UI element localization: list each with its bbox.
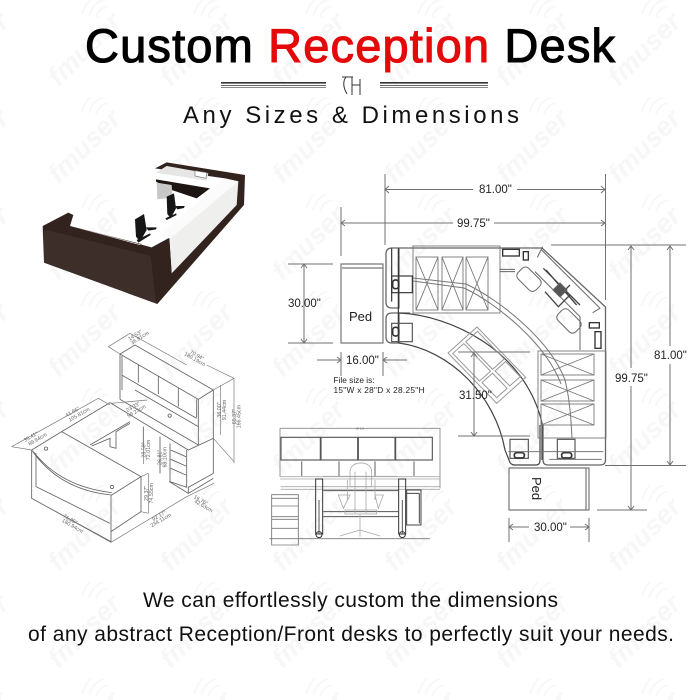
lower pedestal with rotated label: Ped xyxy=(529,477,544,500)
top dimension 81.00 xyxy=(385,174,606,300)
monitor stands xyxy=(302,461,414,476)
chair rear xyxy=(165,193,185,220)
dimension labels: 36.91cm xyxy=(130,330,151,346)
dimension labels: 41.66" xyxy=(65,406,81,419)
chair front xyxy=(135,214,157,243)
left pedestal with label xyxy=(341,264,383,343)
front elevation drawing: 96 1/2 xyxy=(356,427,364,431)
dimension labels: 70.94" xyxy=(188,349,205,362)
dimension 16.00: 16.00" xyxy=(346,355,379,367)
task chair xyxy=(338,463,383,537)
dimension 31.50 xyxy=(458,352,530,436)
dimension labels: 180.94cm xyxy=(61,518,84,535)
dimension labels: 26.81" xyxy=(158,450,164,465)
monitors xyxy=(281,437,432,460)
dimension labels: 89.94cm xyxy=(27,432,49,448)
dimension labels: 91.44cm xyxy=(222,399,228,420)
computer tower xyxy=(407,490,421,525)
right dimension 99.75: 99.75" xyxy=(615,373,648,385)
dimension 30.00 left: 30.00" xyxy=(288,298,321,310)
upper storage units xyxy=(413,246,500,313)
desktop surfaces xyxy=(280,476,440,489)
front elevation drawing xyxy=(269,427,440,545)
dimension 30.00 left xyxy=(288,264,333,343)
dimension labels: 23.33" xyxy=(125,401,142,414)
divider with ornament xyxy=(221,77,488,95)
left pedestal with label: Ped xyxy=(349,309,372,324)
floor plan of reception desk xyxy=(386,246,606,465)
dimension labels: 16.76" xyxy=(192,494,209,507)
dimension labels: 42.63cm xyxy=(193,499,214,514)
dimension labels: 29.37" xyxy=(144,486,150,501)
top dimension 99.75 xyxy=(341,207,605,256)
dimension 30.00 bottom xyxy=(509,518,589,542)
photo of reception desk xyxy=(43,162,245,304)
top dimension 81.00: 81.00" xyxy=(479,184,512,196)
caption line 1: We can effortlessly custom the dimensions xyxy=(143,589,558,612)
isometric desk drawing with dimensions xyxy=(12,329,243,542)
file size note xyxy=(334,375,424,395)
outer counter outline xyxy=(386,248,606,465)
desk legs xyxy=(316,479,406,538)
dimension labels: 180.19cm xyxy=(183,351,207,369)
corner workstation xyxy=(500,247,601,350)
dimension labels: 105.81cm xyxy=(68,406,92,424)
dimension labels: 59.23cm xyxy=(126,404,148,420)
hutch cabinet xyxy=(120,345,213,445)
subtitle: Any Sizes & Dimensions xyxy=(183,102,519,129)
dimension labels: 71.25" xyxy=(62,513,78,526)
dimension labels: 72.01cm xyxy=(146,439,152,460)
lower pedestal with rotated label xyxy=(509,468,589,510)
right dimension 81.00: 81.00" xyxy=(654,350,687,362)
right dimension 81.00 xyxy=(551,245,687,466)
top dimension 99.75: 99.75" xyxy=(457,218,490,230)
dimension labels: 28.50" xyxy=(141,442,147,458)
dimension labels: 74.55cm xyxy=(149,483,155,504)
dimension 16.00 xyxy=(317,352,407,376)
caption line 2: of any abstract Reception/Front desks to perfectly suit your needs. xyxy=(28,623,674,646)
bow front desk xyxy=(32,414,171,542)
dimension labels: 36.00" xyxy=(217,402,223,418)
inner curved counter edges xyxy=(399,313,542,465)
dimension labels: 65.37" xyxy=(232,409,238,424)
dimension labels: 234.11cm xyxy=(150,512,173,529)
dimension labels: 68.10cm xyxy=(163,447,169,468)
dimension labels: 166.45cm xyxy=(237,404,243,428)
dimension labels xyxy=(23,329,243,535)
dimension lines xyxy=(12,333,234,542)
task positions xyxy=(392,248,412,343)
angled inner desk xyxy=(448,327,526,403)
right storage units xyxy=(538,351,606,438)
dimension labels: 35.41" xyxy=(23,431,39,444)
file size note: File size is: xyxy=(334,375,375,385)
work surface and bridge xyxy=(62,399,213,493)
dimension labels: 14.53" xyxy=(127,329,144,342)
dimension 31.50: 31.50" xyxy=(459,390,492,402)
right dimension 99.75 xyxy=(597,246,648,510)
dimension 30.00 bottom: 30.00" xyxy=(534,522,567,534)
pedestal xyxy=(272,495,298,545)
file size note: 15"W x 28"D x 28.25"H xyxy=(334,385,424,395)
floor line xyxy=(269,537,430,540)
title: Custom Reception Desk xyxy=(85,19,616,72)
dimension labels: 92.17" xyxy=(151,510,168,523)
